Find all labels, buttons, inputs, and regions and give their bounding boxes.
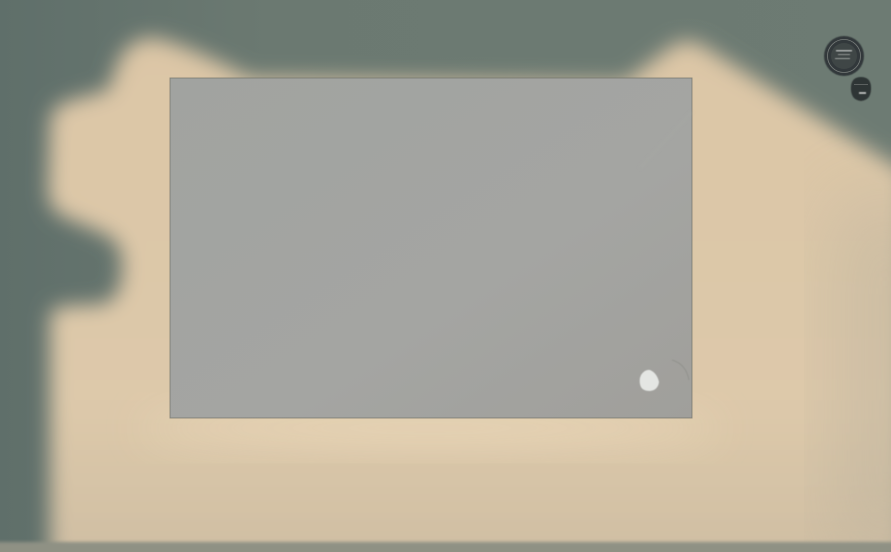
warm glow below panel [140, 412, 720, 444]
white pebble [640, 370, 659, 391]
grey panel [170, 78, 692, 418]
small badge [851, 77, 871, 101]
floor strip [0, 542, 891, 552]
grey shade at right edge [840, 200, 891, 552]
round badge [824, 36, 864, 76]
